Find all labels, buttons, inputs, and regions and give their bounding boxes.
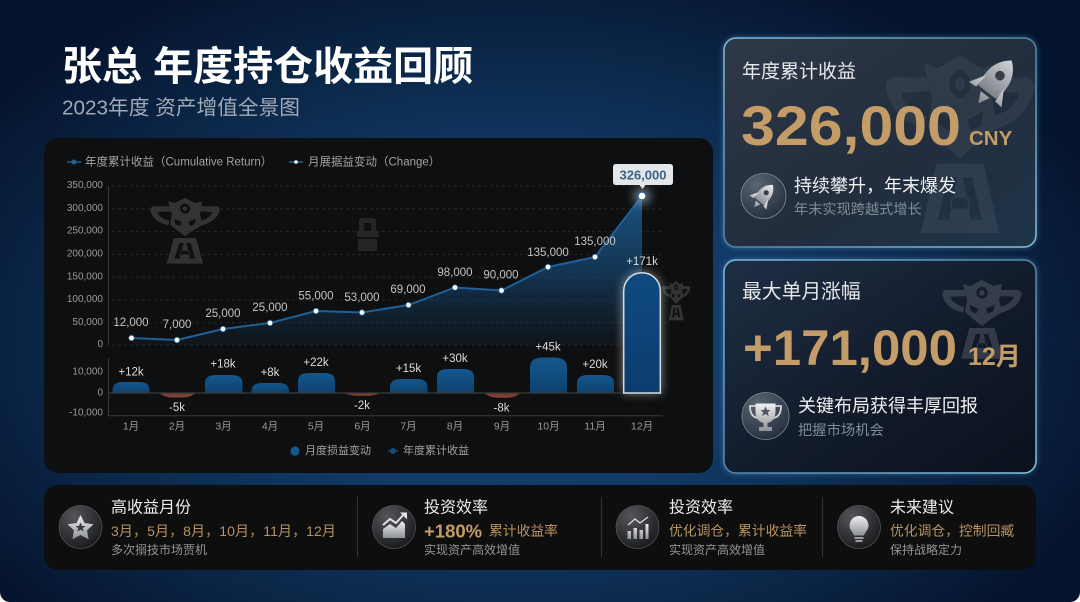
watermark: mask left xyxy=(150,198,220,264)
item: high return months: 高收益月份 xyxy=(111,498,191,516)
item: investment efficiency two xyxy=(616,498,807,557)
item: investment efficiency one: 累计收益率 xyxy=(489,522,558,538)
y axis labels: change xyxy=(69,366,103,418)
x axis labels: 7月 xyxy=(400,420,417,432)
x axis labels: 2月 xyxy=(169,420,185,432)
data labels: change: -2k xyxy=(354,400,370,412)
data labels: cumulative: 90,000 xyxy=(483,270,519,282)
item: investment efficiency one: +180% xyxy=(424,520,482,542)
watermark: mask right xyxy=(662,281,690,320)
icon: growth chart xyxy=(372,506,416,548)
heading: annual return: 年度累计收益 xyxy=(742,60,856,82)
data labels: change: -5k xyxy=(169,402,185,414)
x axis labels: 1月 xyxy=(123,420,139,432)
data labels: change: +12k xyxy=(118,366,144,378)
x axis labels: 10月 xyxy=(537,420,560,432)
item: future advice: 保持战略定力 xyxy=(890,542,962,557)
heading: largest gain: 最大单月涨幅 xyxy=(742,281,861,303)
y axis labels: cumulative: 250,000 xyxy=(67,226,103,236)
x axis labels: 9月 xyxy=(494,420,510,432)
y axis labels: cumulative: 300,000 xyxy=(67,203,103,214)
panel: largest monthly gain xyxy=(724,260,1036,473)
item: investment efficiency two: 优化调仓，累计收益率 xyxy=(669,522,807,538)
unit: CNY: CNY xyxy=(969,127,1013,150)
item: investment efficiency two: 投资效率 xyxy=(669,498,733,516)
x axis labels: 3月 xyxy=(215,420,232,432)
x axis labels: 6月 xyxy=(354,420,371,432)
item: future advice: 优化调仓，控制回臧 xyxy=(890,522,1014,538)
x axis labels: 4月 xyxy=(262,420,278,432)
text: seize opportunity: 把握市场机会 xyxy=(798,422,884,439)
data labels: cumulative: 98,000 xyxy=(437,267,473,279)
icon: trophy badge xyxy=(742,392,789,440)
subtitle: 2023年度 资产增值全景图 xyxy=(62,96,300,120)
data labels: cumulative: 12,000 xyxy=(113,317,149,329)
y axis labels: change: 0 xyxy=(97,388,103,398)
text: year end growth: 年末实现跨越式增长 xyxy=(794,202,922,218)
x axis labels: 11月 xyxy=(584,420,606,432)
unit: December: 12月 xyxy=(968,343,1021,371)
x axis labels: 8月 xyxy=(447,420,463,432)
y axis labels: cumulative: 50,000 xyxy=(72,317,103,328)
icon: light bulb xyxy=(838,506,880,548)
grid lines xyxy=(112,186,665,345)
icon: large rocket xyxy=(962,48,1028,116)
icon: star xyxy=(59,506,102,548)
data labels: change: +20k xyxy=(582,359,608,371)
data labels: change: +15k xyxy=(396,363,421,375)
y axis labels: cumulative: 0 xyxy=(97,339,103,350)
item: high return months xyxy=(59,498,336,557)
legend: chart top xyxy=(67,154,440,168)
icon: rocket badge xyxy=(741,174,786,218)
value: +171,000: +171,000 xyxy=(743,320,957,376)
data labels: change: +22k xyxy=(303,357,329,369)
legend: chart bottom: 年度累计收益 xyxy=(403,443,469,457)
data labels: change: +30k xyxy=(442,353,468,365)
item: investment efficiency one: 实现资产高效增值 xyxy=(424,542,520,557)
callout: 326,000: 326,000 xyxy=(620,168,666,182)
data labels: change: +45k xyxy=(535,342,561,354)
legend: chart bottom xyxy=(290,443,469,457)
panel: bottom summary xyxy=(44,485,1036,570)
title: 张总 年度持仓收益回顾 xyxy=(62,45,473,89)
legend: chart top: 月展据益变动（Change） xyxy=(308,154,440,168)
data labels: change: +8k xyxy=(261,367,280,379)
text: steady climb: 持续攀升，年末爆发 xyxy=(794,176,956,196)
panel: annual cumulative return xyxy=(724,38,1036,247)
legend: chart top: 年度累计收益（Cumulative Return） xyxy=(85,154,272,168)
x axis labels xyxy=(123,420,653,432)
item: investment efficiency two: 实现资产高效增值 xyxy=(669,542,765,557)
item: high return months: 3月，5月，8月，10月，11月，12月 xyxy=(111,523,336,539)
data labels: cumulative: 7,000 xyxy=(163,319,191,331)
bar chart: monthly change xyxy=(108,272,663,416)
y axis labels: cumulative xyxy=(67,180,103,350)
item: future advice: 未来建议 xyxy=(890,498,954,516)
area chart: cumulative return xyxy=(129,188,650,345)
panel: chart xyxy=(44,138,713,473)
watermark: small lock xyxy=(357,218,379,251)
data labels: cumulative: 53,000 xyxy=(344,292,380,304)
data labels: cumulative: 25,000 xyxy=(205,308,241,320)
legend: chart bottom: 月度损益变动 xyxy=(305,443,371,457)
item: investment efficiency one: 投资效率 xyxy=(424,498,488,516)
y axis labels: cumulative: 350,000 xyxy=(67,180,103,191)
data labels: cumulative: 135,000 xyxy=(527,247,569,259)
y axis labels: cumulative: 150,000 xyxy=(67,272,103,282)
callout: 326,000 xyxy=(613,164,673,189)
data labels: change: +171k xyxy=(626,256,658,268)
data labels: cumulative: 135,000 xyxy=(574,236,616,248)
data labels: cumulative: 69,000 xyxy=(390,284,426,296)
watermark: card one mask xyxy=(886,55,1034,233)
data labels: cumulative: 55,000 xyxy=(298,290,334,302)
data labels: change xyxy=(118,256,658,414)
watermark: card two mask xyxy=(942,280,1022,359)
data labels: change: +18k xyxy=(210,358,236,370)
data labels: cumulative xyxy=(113,236,616,331)
y axis labels: cumulative: 200,000 xyxy=(67,248,103,260)
x axis labels: 12月 xyxy=(631,420,653,432)
value: 326,000: 326,000 xyxy=(741,94,961,157)
item: investment efficiency one xyxy=(372,498,558,557)
item: high return months: 多次搦技市场贾机 xyxy=(111,542,207,557)
icon: bar trend xyxy=(616,506,659,548)
y axis labels: change: 10,000 xyxy=(72,366,103,378)
data labels: cumulative: 25,000 xyxy=(252,302,288,314)
y axis labels: change: -10,000 xyxy=(69,408,103,418)
data labels: change: -8k xyxy=(494,402,510,414)
text: key positioning: 关键布局获得丰厚回报 xyxy=(798,396,978,416)
y axis labels: cumulative: 100,000 xyxy=(67,294,103,305)
x axis labels: 5月 xyxy=(308,420,324,432)
item: future advice xyxy=(838,498,1014,557)
